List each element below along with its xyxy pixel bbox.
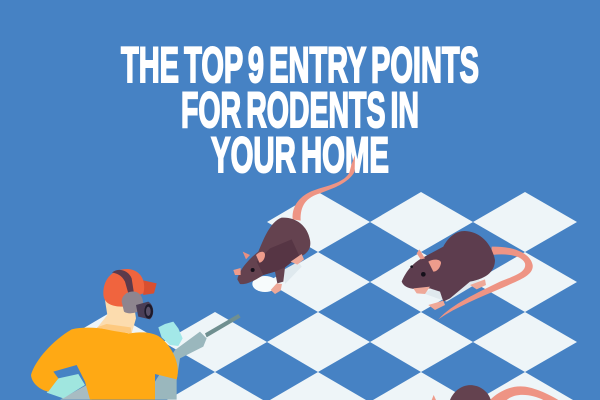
right glove <box>158 322 183 346</box>
shirt <box>31 328 178 400</box>
neck <box>97 300 136 333</box>
cap brim <box>142 280 157 295</box>
left glove <box>47 374 85 398</box>
rat tail <box>438 247 533 319</box>
ear muff <box>122 292 143 313</box>
title: FOR RODENTS IN <box>181 82 419 138</box>
headband <box>112 270 134 293</box>
exterminator <box>31 269 241 400</box>
sprayer <box>60 314 241 400</box>
title <box>121 37 479 183</box>
rat tail <box>293 155 355 221</box>
checkered floor <box>60 192 577 400</box>
collar <box>97 324 132 333</box>
rat: bottom <box>432 385 558 400</box>
rat: right <box>402 231 533 319</box>
rat: upper left <box>233 155 355 294</box>
cap <box>103 269 144 307</box>
title: YOUR HOME <box>211 127 389 183</box>
rat tail <box>490 386 558 400</box>
gas mask <box>136 302 153 319</box>
